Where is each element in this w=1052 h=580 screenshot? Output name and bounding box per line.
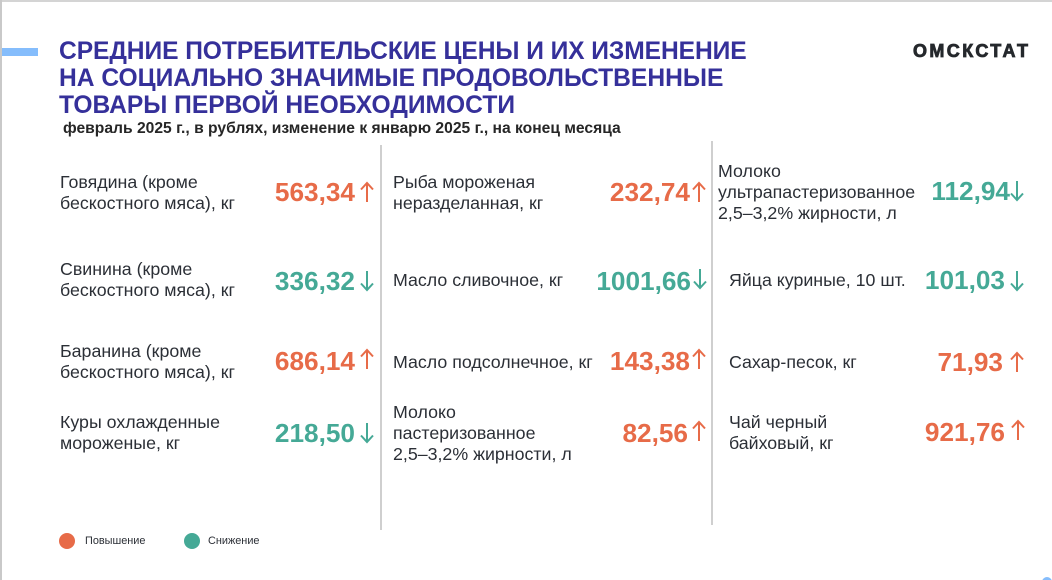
label: black tea — [729, 412, 833, 453]
legend text: increase: Повышение — [85, 535, 145, 547]
label: black tea: Чай черный — [729, 412, 827, 432]
value: butter: 1001,66 — [596, 266, 691, 296]
value: black tea: 921,76 — [925, 417, 1005, 447]
legend dot: increase — [59, 533, 75, 549]
label: fish: Рыба мороженая — [393, 172, 535, 192]
label: fish: неразделанная, кг — [393, 193, 543, 213]
value: eggs: 101,03 — [925, 265, 1005, 295]
label: pork: Свинина (кроме — [60, 259, 192, 279]
label: pasteurized milk: Молоко — [393, 402, 456, 422]
label: mutton — [60, 341, 235, 382]
label: sunflower oil: Масло подсолнечное, кг — [393, 352, 593, 372]
value: beef: 563,34 — [275, 177, 355, 207]
title: СРЕДНИЕ ПОТРЕБИТЕЛЬСКИЕ ЦЕНЫ И ИХ ИЗМЕНЕНИЕ — [59, 38, 747, 65]
label: fish — [393, 172, 543, 213]
arrow up: sugar — [1010, 352, 1024, 372]
label: butter: Масло сливочное, кг — [393, 270, 563, 290]
label: pasteurized milk: 2,5–3,2% жирности, л — [393, 444, 572, 464]
brand: Омскстат: ОМСКСТАТ — [913, 41, 1030, 61]
arrow down: UHT milk — [1010, 181, 1024, 202]
arrow up: fish — [692, 182, 706, 202]
subtitle: февраль 2025 г., в рублях, изменение к январю 2025 г., на конец месяца — [63, 120, 621, 137]
arrow down: chicken — [360, 423, 374, 444]
label: beef: бескостного мяса), кг — [60, 193, 235, 213]
title: НА СОЦИАЛЬНО ЗНАЧИМЫЕ ПРОДОВОЛЬСТВЕННЫЕ — [59, 65, 723, 92]
label: UHT milk: Молоко — [718, 161, 781, 181]
label: UHT milk — [718, 161, 915, 223]
label: pasteurized milk: пастеризованное — [393, 423, 535, 443]
value: sunflower oil: 143,38 — [610, 346, 690, 376]
title: ТОВАРЫ ПЕРВОЙ НЕОБХОДИМОСТИ — [59, 92, 515, 119]
value: fish: 232,74 — [610, 177, 690, 207]
legend dot: decrease — [184, 533, 200, 549]
label: sugar: Сахар-песок, кг — [729, 352, 857, 372]
label: beef: Говядина (кроме — [60, 172, 198, 192]
accent bar — [2, 48, 38, 56]
legend: decrease — [184, 533, 259, 549]
value: mutton: 686,14 — [275, 346, 355, 376]
label: pasteurized milk — [393, 402, 572, 464]
label: pork — [60, 259, 235, 300]
arrow down: pork — [360, 271, 374, 292]
label: mutton: Баранина (кроме — [60, 341, 201, 361]
column divider 2 — [711, 141, 713, 525]
value: pasteurized milk: 82,56 — [622, 418, 688, 448]
arrow up: black tea — [1011, 420, 1025, 440]
value: pork: 336,32 — [275, 266, 355, 296]
label: beef — [60, 172, 235, 213]
arrow down: butter — [693, 269, 707, 290]
label: eggs: Яйца куриные, 10 шт. — [729, 270, 906, 290]
column divider 1 — [380, 145, 382, 530]
label: UHT milk: 2,5–3,2% жирности, л — [718, 203, 897, 223]
arrow up: mutton — [360, 348, 374, 369]
arrow up: pasteurized milk — [692, 420, 706, 441]
value: sugar: 71,93 — [937, 347, 1003, 377]
arrow up: beef — [360, 182, 374, 202]
arrow down: eggs — [1010, 271, 1024, 292]
label: UHT milk: ультрапастеризованное — [718, 182, 915, 202]
arrow up: sunflower oil — [692, 348, 706, 369]
legend text: decrease: Снижение — [208, 535, 259, 547]
legend: increase — [59, 533, 145, 549]
label: chicken: Куры охлажденные — [60, 412, 220, 432]
label: chicken: мороженые, кг — [60, 433, 180, 453]
value: chicken: 218,50 — [275, 418, 355, 448]
label: chicken — [60, 412, 220, 453]
page marker — [1042, 577, 1052, 580]
label: pork: бескостного мяса), кг — [60, 280, 235, 300]
label: black tea: байховый, кг — [729, 433, 833, 453]
title — [59, 38, 747, 119]
value: UHT milk: 112,94 — [931, 176, 1010, 206]
label: mutton: бескостного мяса), кг — [60, 362, 235, 382]
